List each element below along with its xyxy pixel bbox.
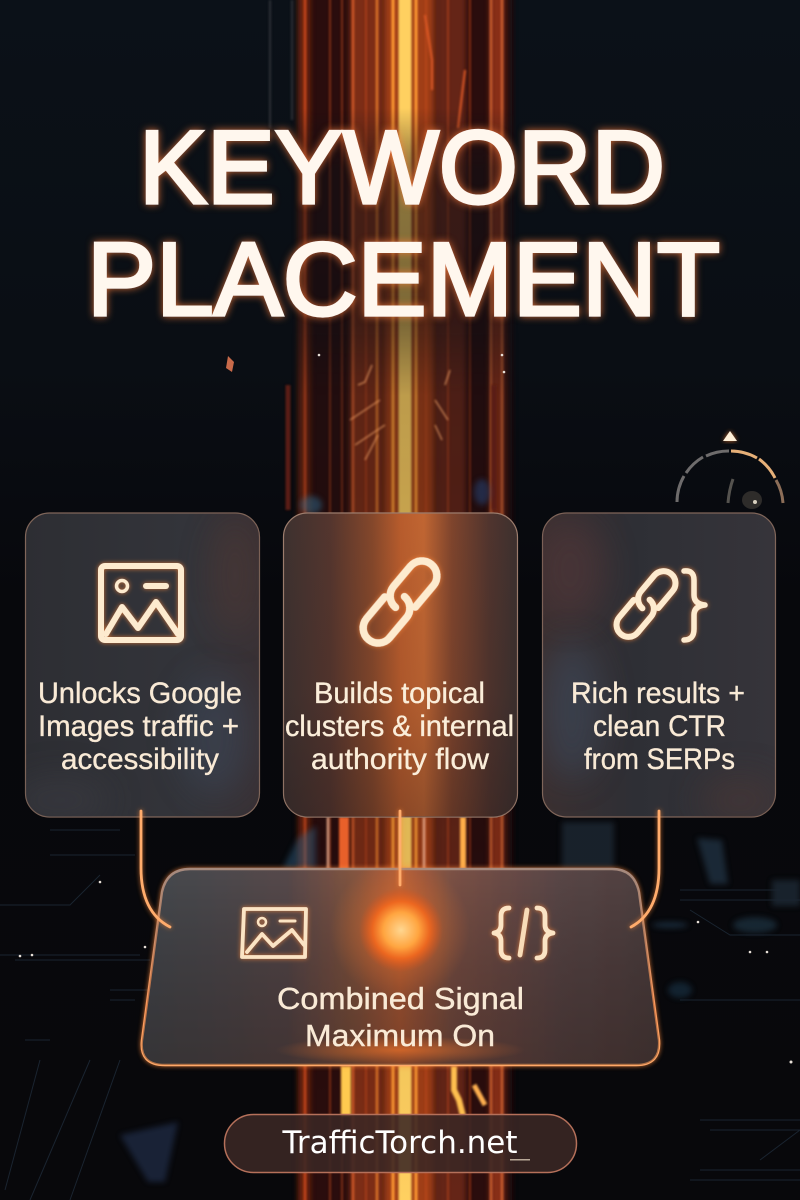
card text: authority flow [311, 743, 489, 776]
gauge icon [677, 431, 783, 509]
card text: Unlocks Google [38, 677, 242, 710]
card text: clean CTR [593, 710, 726, 743]
glowing core [330, 860, 470, 1000]
title line 1: KEYWORD [139, 110, 665, 226]
small ember [226, 356, 234, 372]
icon: image [101, 566, 181, 640]
panel text [277, 981, 524, 1053]
card text: accessibility [61, 743, 219, 776]
icon: small image [242, 909, 306, 957]
card text: from SERPs [584, 743, 735, 776]
panel text: Maximum On [305, 1018, 495, 1053]
icon: chain link [357, 555, 443, 649]
circuit traces [0, 830, 800, 1200]
card text [38, 677, 242, 776]
panel: rich results [535, 513, 780, 825]
sparks [19, 354, 792, 1064]
icon: link with brace [612, 566, 705, 642]
card text: Rich results + [571, 677, 745, 710]
footer label: TrafficTorch.net [282, 1125, 518, 1161]
side streaks [270, 0, 494, 510]
card text: Builds topical [314, 677, 485, 710]
footer pill [224, 1114, 576, 1172]
panel: topical clusters [284, 513, 518, 817]
icon: code braces [494, 908, 553, 958]
blue circuit blooms [120, 479, 800, 1182]
title line 2: PLACEMENT [87, 222, 720, 338]
card text: clusters & internal [285, 710, 514, 743]
card text [285, 677, 514, 776]
panel: image traffic [10, 513, 260, 825]
card text: Images traffic + [38, 710, 239, 743]
lower hot streaks [328, 817, 485, 1116]
central light column [298, 0, 512, 1200]
panel: combined signal [142, 860, 659, 1065]
panel text: Combined Signal [277, 981, 524, 1016]
card text [571, 677, 745, 776]
title [87, 110, 720, 338]
connector lines [141, 811, 659, 927]
